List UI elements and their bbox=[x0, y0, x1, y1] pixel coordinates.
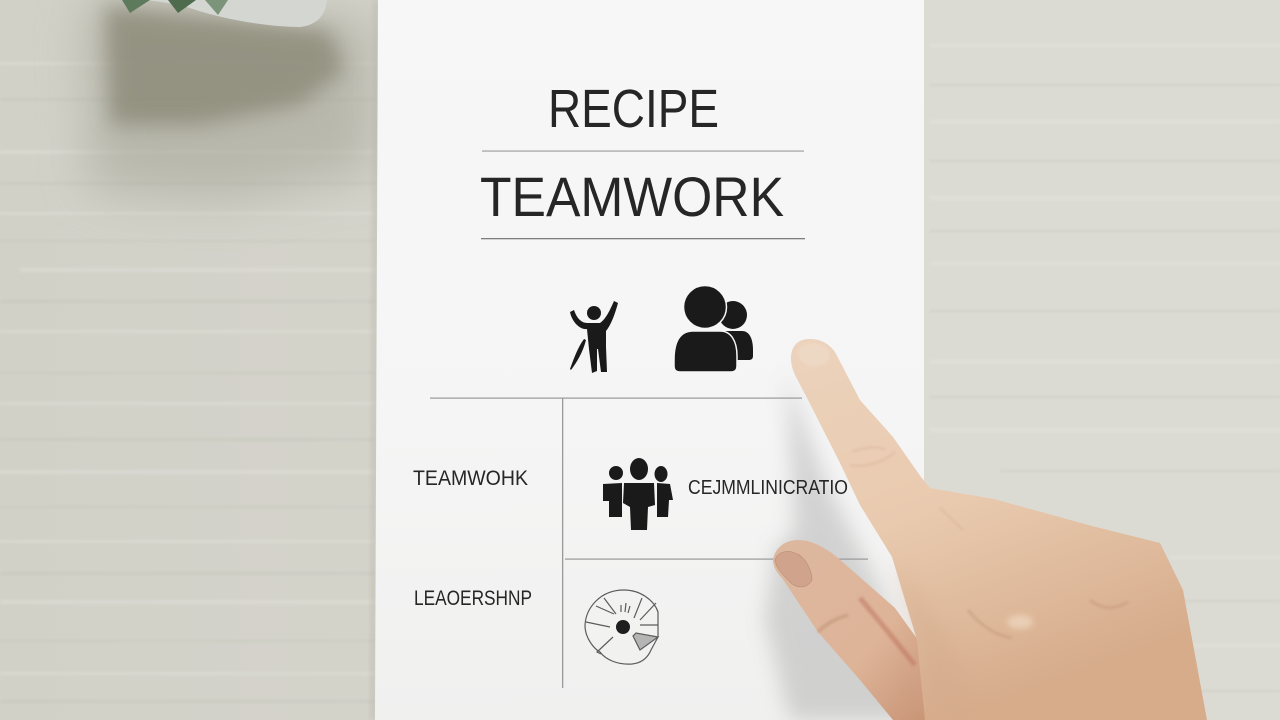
fingernail highlight bbox=[797, 343, 830, 366]
paper edge shadow bbox=[371, 0, 378, 720]
left hand shading bbox=[892, 557, 980, 720]
paper sheet bbox=[375, 0, 925, 720]
hand shadow on paper bbox=[760, 394, 893, 720]
title rule bottom bbox=[481, 238, 805, 239]
title: TEAMWORK: TEAMWORK bbox=[480, 165, 784, 228]
label: communication: CEJMMLINICRATIO bbox=[688, 477, 848, 499]
hand: thumb finger bbox=[773, 540, 932, 720]
thumb nail bbox=[775, 551, 812, 587]
icon: radial wheel diagram bbox=[585, 590, 658, 664]
icon: group of three people bbox=[603, 458, 673, 530]
label: leadership row: LEAOERSHNP bbox=[414, 587, 532, 610]
label: teamwork row: TEAMWOHK bbox=[413, 467, 528, 490]
title: RECIPE: RECIPE bbox=[548, 79, 719, 139]
knuckle creases bbox=[850, 447, 963, 530]
hand: pointing finger and back of hand bbox=[791, 339, 1207, 720]
knuckle highlight bbox=[1007, 615, 1033, 629]
icon: two people bbox=[674, 286, 753, 372]
plant leaves bbox=[122, 0, 228, 15]
title rule top bbox=[482, 150, 804, 152]
icon: person cheering bbox=[570, 301, 618, 373]
shadow cast by plant pot bbox=[85, 0, 375, 200]
shading along hand creases bbox=[968, 600, 1128, 638]
plant pot with leaves bbox=[122, 0, 327, 27]
table grid lines bbox=[430, 398, 868, 688]
